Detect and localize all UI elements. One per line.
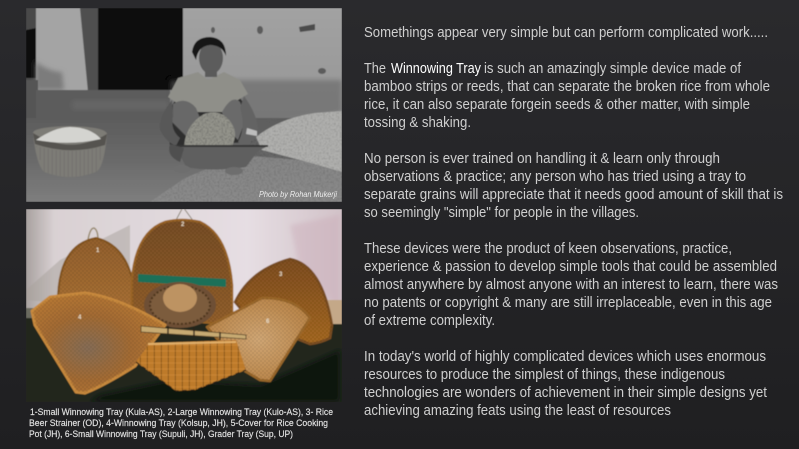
paragraph: the winnowing tray: The bbox=[364, 61, 386, 77]
paragraph: skill: observations & practice; any person who has tried using a tray to bbox=[364, 169, 746, 185]
caption: Beer Strainer (OD), 4-Winnowing Tray (Kolsup, JH), 5-Cover for Rice Cooking bbox=[29, 418, 328, 428]
rice heap bbox=[256, 111, 342, 172]
photographer credit: @Soumik bbox=[344, 357, 353, 392]
paragraph: the winnowing tray: tossing & shaking. bbox=[364, 115, 471, 131]
blouse bbox=[168, 72, 248, 112]
hat bbox=[144, 282, 216, 328]
caption: 1-Small Winnowing Tray (Kula-AS), 2-Large Winnowing Tray (Kulo-AS), 3- Rice bbox=[30, 407, 333, 417]
paragraph: the winnowing tray: bamboo strips or reeds, that can separate the broken rice from whole bbox=[364, 79, 770, 95]
tray 4 bbox=[32, 293, 165, 393]
tray 6 bbox=[207, 298, 310, 381]
tray 2: 2 bbox=[181, 222, 185, 228]
arms bbox=[164, 100, 180, 146]
tray 1: 1 bbox=[96, 248, 100, 254]
head bbox=[199, 42, 223, 74]
grain on tray bbox=[184, 112, 235, 146]
paragraph: observations bbox=[364, 241, 778, 329]
paragraph: the winnowing tray: rice, it can also separate forgein seeds & other matter, with simple bbox=[364, 97, 750, 113]
paragraph: skill bbox=[364, 151, 783, 221]
tray 6: 6 bbox=[266, 319, 270, 325]
feet bbox=[186, 166, 188, 167]
paragraph: today's world bbox=[364, 349, 767, 419]
bamboo bar bbox=[141, 326, 246, 339]
tray 3 bbox=[235, 259, 332, 344]
paragraph: the winnowing tray bbox=[364, 61, 770, 131]
paragraph: today's world: In today's world of highly complicated devices which uses enormous bbox=[364, 349, 766, 365]
photo credit: Photo by Rohan Mukerji bbox=[259, 190, 337, 199]
paragraph: today's world: resources to produce the simplest of things, these indigenous bbox=[364, 367, 725, 383]
photo: woman using a winnowing tray bbox=[26, 8, 342, 202]
paragraph: skill: so seemingly "simple" for people in the villages. bbox=[364, 205, 639, 221]
tray 3: 3 bbox=[279, 272, 283, 278]
caption: Pot (JH), 6-Small Winnowing Tray (Supuli, JH), Grader Tray (Sup, UP) bbox=[29, 429, 293, 439]
paragraph: today's world: achieving amazing feats using the least of resources bbox=[364, 403, 671, 419]
tray 1 bbox=[58, 238, 133, 312]
paragraph: the winnowing tray: is such an amazingly simple device made of bbox=[484, 61, 742, 77]
tray 7 bbox=[136, 340, 246, 391]
green strip bbox=[138, 274, 226, 287]
knees bbox=[172, 101, 200, 136]
tray 4: 4 bbox=[78, 315, 82, 321]
paragraph: skill: No person is ever trained on handling it & learn only through bbox=[364, 151, 720, 167]
tray 2 bbox=[132, 220, 232, 325]
paragraph: observations: of extreme complexity. bbox=[364, 313, 495, 329]
photo: collection of bamboo trays bbox=[26, 207, 353, 402]
woman bbox=[160, 37, 268, 175]
intro line: Somethings appear very simple but can perform complicated work..... bbox=[364, 25, 768, 41]
tray bbox=[176, 146, 268, 170]
skirt and legs bbox=[167, 98, 252, 146]
paragraph: observations: These devices were the product of keen observations, practice, bbox=[364, 241, 732, 257]
paragraph: today's world: technologies are wonders of achievement in their simple designs yet bbox=[364, 385, 767, 401]
hanging loops bbox=[88, 228, 98, 240]
basket of rice bbox=[33, 126, 107, 177]
caption bbox=[29, 407, 333, 439]
paragraph: the winnowing tray: Winnowing Tray bbox=[391, 61, 482, 77]
paragraph: observations: no patents or copyright & many are still irreplaceable, even in this age bbox=[364, 295, 772, 311]
